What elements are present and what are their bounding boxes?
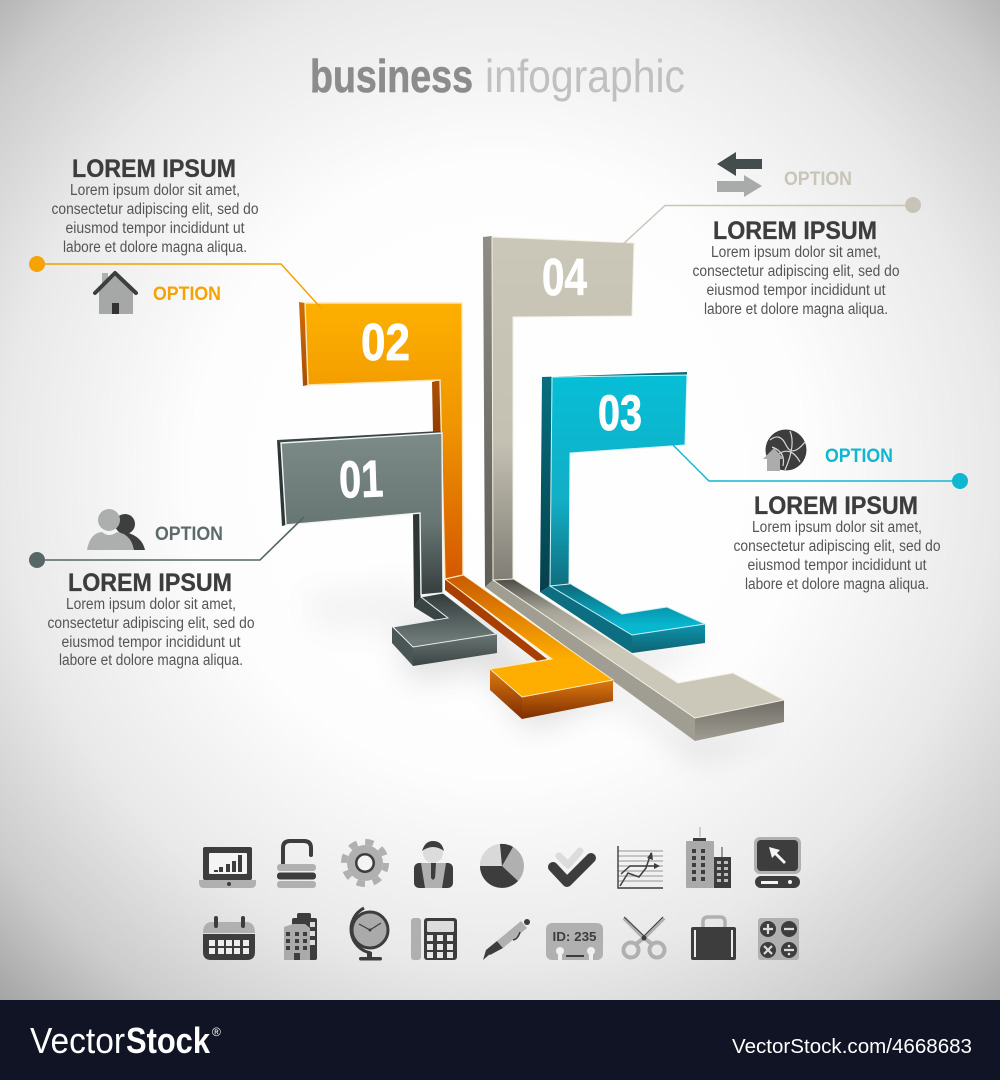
icon: globe clock xyxy=(351,908,388,960)
text block 01: eiusmod tempor incididunt ut xyxy=(62,634,241,651)
floor shadows xyxy=(300,580,790,760)
callout 02 connector xyxy=(29,256,321,308)
text block 03: labore et dolore magna aliqua. xyxy=(745,576,929,593)
icon: line chart xyxy=(618,846,663,888)
watermark bar: VectorStock.com/4668683 xyxy=(732,1036,972,1058)
text block 03: eiusmod tempor incididunt ut xyxy=(748,557,927,574)
watermark bar: Vector xyxy=(30,1020,125,1061)
text block 03: consectetur adipiscing elit, sed do xyxy=(734,538,940,555)
text block 04: LOREM IPSUM xyxy=(713,217,877,245)
text block 04: labore et dolore magna aliqua. xyxy=(704,301,888,318)
text block 02: Lorem ipsum dolor sit amet, xyxy=(70,182,240,199)
text block 01: Lorem ipsum dolor sit amet, xyxy=(66,596,236,613)
watermark bar: ® xyxy=(212,1025,221,1039)
flag 03 teal xyxy=(540,372,705,653)
icon: computer xyxy=(754,837,801,888)
text block 01 xyxy=(48,569,254,669)
icon: laptop chart xyxy=(199,847,256,888)
flag 04 beige: 04 xyxy=(542,249,587,307)
text block 04 xyxy=(692,217,900,318)
icon: scissors xyxy=(624,917,664,958)
text block 01: consectetur adipiscing elit, sed do xyxy=(48,615,254,632)
flag 02 orange xyxy=(299,302,613,719)
icon: office building xyxy=(284,913,317,960)
icon: globe and house xyxy=(763,430,806,471)
text block 02: consectetur adipiscing elit, sed do xyxy=(52,201,258,218)
option label 01: OPTION xyxy=(155,523,223,545)
icon: businessman xyxy=(414,841,453,888)
icon row 1 xyxy=(199,827,801,888)
icon: id card xyxy=(546,923,603,960)
icon: calculator with bar xyxy=(411,918,457,960)
flag 01 slate: 01 xyxy=(338,450,384,510)
text block 02: labore et dolore magna aliqua. xyxy=(63,239,247,256)
text block 04: consectetur adipiscing elit, sed do xyxy=(692,263,900,280)
flag 02 orange: 02 xyxy=(361,314,410,372)
flag 03 teal: 03 xyxy=(598,385,642,441)
text block 01: LOREM IPSUM xyxy=(68,569,232,597)
icon: pie chart xyxy=(480,844,524,888)
icon: users xyxy=(87,509,145,550)
icon row 2 xyxy=(203,908,799,960)
icon: check mark xyxy=(553,851,591,882)
text block 02: LOREM IPSUM xyxy=(72,155,236,183)
watermark bar: Stock xyxy=(126,1020,211,1061)
option label 04: OPTION xyxy=(784,168,852,190)
icon: math keypad xyxy=(758,918,799,960)
title xyxy=(310,50,685,102)
text block 02 xyxy=(52,155,258,256)
option label 02: OPTION xyxy=(153,283,221,305)
text block 03 xyxy=(734,492,940,593)
icon: briefcase xyxy=(691,917,736,960)
callout 01 connector xyxy=(29,517,304,568)
text block 03: LOREM IPSUM xyxy=(754,492,918,520)
title: business xyxy=(310,50,473,102)
icon: gear xyxy=(344,842,386,884)
text block 04: Lorem ipsum dolor sit amet, xyxy=(711,244,881,261)
watermark bar xyxy=(0,1000,1000,1080)
icon: house xyxy=(95,273,136,314)
icon: calendar xyxy=(203,916,255,960)
text block 02: eiusmod tempor incididunt ut xyxy=(66,220,245,237)
text block 04: eiusmod tempor incididunt ut xyxy=(706,282,886,299)
title: infographic xyxy=(485,50,685,102)
icon: pen xyxy=(483,919,530,960)
flag 04 beige xyxy=(483,236,784,741)
icon: id card: ID: 235 xyxy=(552,930,597,944)
callout 04 connector xyxy=(622,197,921,245)
flag 01 slate xyxy=(277,431,497,666)
icon: skyscrapers xyxy=(686,827,731,888)
option label 03: OPTION xyxy=(825,445,893,467)
icon: open lock xyxy=(277,841,316,888)
text block 01: labore et dolore magna aliqua. xyxy=(59,652,243,669)
icon: swap arrows xyxy=(717,152,762,197)
text block 03: Lorem ipsum dolor sit amet, xyxy=(752,519,922,536)
callout 03 connector xyxy=(673,445,968,489)
